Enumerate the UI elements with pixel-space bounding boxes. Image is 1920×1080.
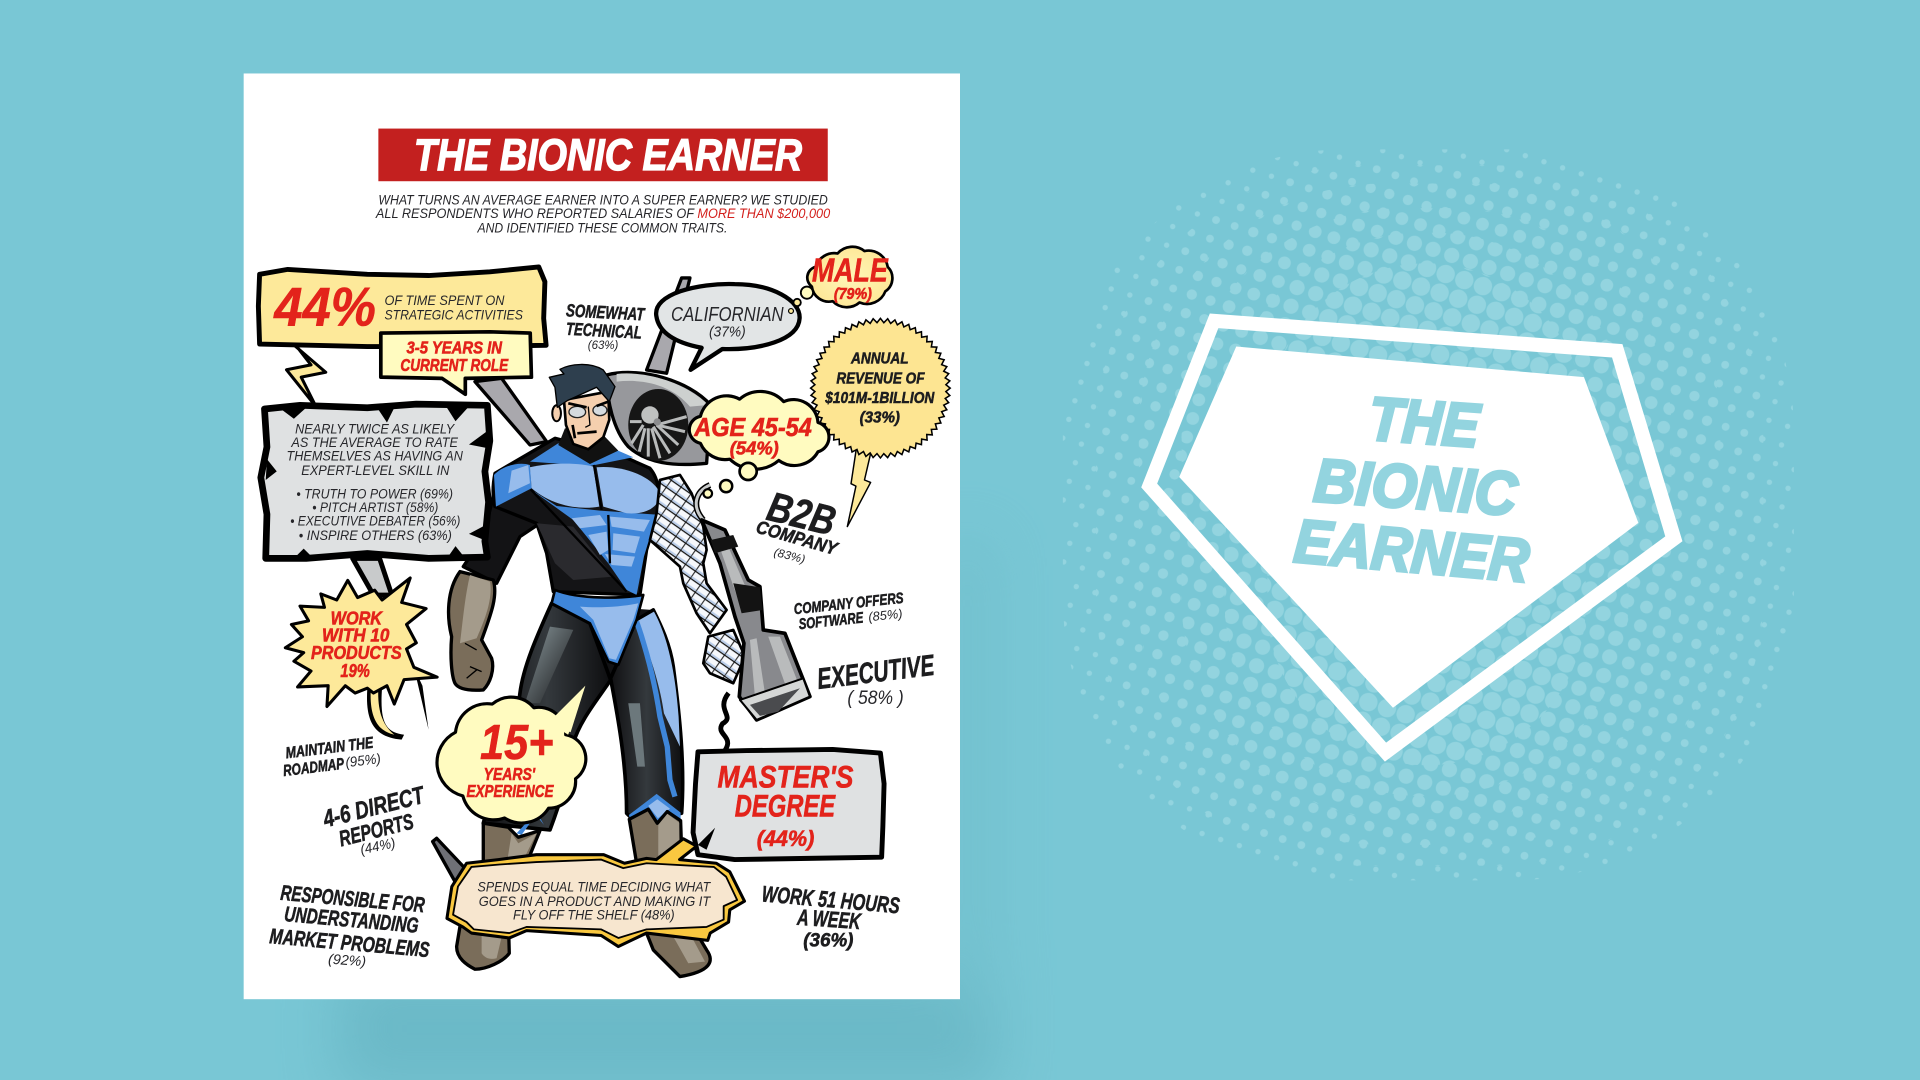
lightning tail <box>847 443 872 527</box>
shield title: BIONIC <box>1312 446 1520 528</box>
callout: annual revenue: (33%) <box>860 409 900 426</box>
label: b2b company: B2B <box>763 482 841 545</box>
spiky burst <box>796 304 965 472</box>
tail <box>353 558 392 595</box>
thought cloud: 15+ years: 15+ <box>480 716 553 770</box>
callout: expert-level skills: NEARLY TWICE AS LIKELY <box>295 420 456 436</box>
far arm and glove <box>449 483 550 690</box>
hero illustration <box>433 278 810 977</box>
callout: 3-5 years: 3-5 YEARS IN <box>407 337 503 357</box>
label: somewhat technical <box>566 300 646 352</box>
lightning tail <box>287 343 326 407</box>
callout: 44% strategic time <box>258 267 546 407</box>
hips and legs <box>483 603 683 830</box>
label: work 51 hours: WORK 51 HOURS <box>761 880 901 918</box>
shield title: THE <box>1367 385 1483 460</box>
label: responsible for market problems: RESPONSIBLE FOR <box>280 881 426 917</box>
label: work 51 hours: A WEEK <box>796 904 863 934</box>
callout: 3-5 years: CURRENT ROLE <box>400 355 509 375</box>
callout: 3-5 years <box>381 332 531 394</box>
abdominals <box>572 515 650 567</box>
callout: master's degree: (44%) <box>757 826 814 851</box>
label: maintain the roadmap: ROADMAP <box>282 756 345 780</box>
halftone dot field <box>1063 149 1794 880</box>
banner: equal time: SPENDS EQUAL TIME DECIDING WHAT <box>478 878 711 894</box>
label: responsible for market problems <box>269 881 431 969</box>
box <box>258 267 546 347</box>
label: b2b company <box>754 482 841 566</box>
callout: work with 10 products <box>285 578 437 740</box>
banner: equal time <box>447 839 744 947</box>
callout: expert-level skills: • TRUTH TO POWER (69%) <box>296 485 453 501</box>
label: maintain the roadmap: (95%) <box>344 750 382 770</box>
label: maintain the roadmap: MAINTAIN THE <box>285 735 375 762</box>
shield outer frame <box>1141 313 1682 762</box>
curly tail <box>367 667 429 740</box>
panel <box>261 404 490 558</box>
label: work 51 hours <box>761 880 901 952</box>
callout: work with 10 products: WORK <box>331 607 384 628</box>
intro text: AND IDENTIFIED THESE COMMON TRAITS. <box>477 220 727 236</box>
leg highlights and stripe <box>517 612 681 835</box>
callout: 44% strategic time: STRATEGIC ACTIVITIES <box>384 307 523 323</box>
card drop shadow <box>337 539 998 1080</box>
thought cloud: age: AGE 45-54 <box>693 414 812 442</box>
back rods <box>433 278 690 882</box>
boots <box>457 809 710 977</box>
label: executive: ( 58% ) <box>847 687 904 709</box>
poster card <box>244 73 960 999</box>
head <box>549 364 618 464</box>
label: maintain the roadmap <box>282 735 382 780</box>
label: company offers software: (85%) <box>868 606 903 624</box>
thought cloud: 15+ years: YEARS' <box>484 764 536 784</box>
callout: expert-level skills: AS THE AVERAGE TO RATE <box>291 434 458 450</box>
starburst <box>285 578 437 707</box>
intro text <box>375 191 830 236</box>
label: company offers software: SOFTWARE <box>798 609 865 633</box>
speech bubble: californian <box>656 284 800 370</box>
callout: expert-level skills: EXPERT-LEVEL SKILL IN <box>301 462 450 478</box>
callout: master's degree: DEGREE <box>735 788 836 824</box>
intro text: WHAT TURNS AN AVERAGE EARNER INTO A SUPER EARNER? WE STUDIED <box>378 191 828 207</box>
callout: annual revenue: REVENUE OF <box>836 370 926 387</box>
callout: expert-level skills <box>261 404 490 595</box>
pectorals <box>530 464 599 508</box>
label: responsible for market problems: (92%) <box>328 951 367 969</box>
robotic arm <box>650 475 745 683</box>
label: somewhat technical: TECHNICAL <box>566 319 642 343</box>
callout: 44% strategic time: 44% <box>273 276 376 338</box>
jet engine <box>607 372 711 464</box>
callout: master's degree: MASTER'S <box>718 758 853 794</box>
title banner: THE BIONIC EARNER <box>414 131 802 180</box>
label: somewhat technical: (63%) <box>588 339 618 352</box>
thought cloud: male: (79%) <box>834 286 872 303</box>
callout: master's degree <box>693 749 884 860</box>
callout: expert-level skills: • INSPIRE OTHERS (63%) <box>299 527 452 543</box>
label: executive <box>815 649 937 709</box>
callout: expert-level skills: THEMSELVES AS HAVING AN <box>287 447 464 463</box>
callout: expert-level skills: • PITCH ARTIST (58%) <box>312 499 438 515</box>
thought cloud: 15+ years <box>437 686 586 823</box>
cannon <box>696 485 810 720</box>
banner: equal time: GOES IN A PRODUCT AND MAKING IT <box>479 893 711 909</box>
callout: work with 10 products: WITH 10 <box>322 625 390 646</box>
shield inner plate <box>1179 347 1638 708</box>
callout: work with 10 products: 19% <box>340 660 370 681</box>
thought cloud: male: MALE <box>812 253 889 290</box>
label: direct reports: 4-6 DIRECT <box>320 782 428 833</box>
thought cloud: male <box>789 247 892 313</box>
callout: annual revenue: ANNUAL <box>850 351 909 368</box>
thought cloud: 15+ years: EXPERIENCE <box>467 781 554 801</box>
speech bubble: californian: (37%) <box>709 325 746 341</box>
suit collar and shoulder <box>530 443 633 466</box>
label: responsible for market problems: MARKET PROBLEMS <box>269 924 431 962</box>
label: company offers software: COMPANY OFFERS <box>793 590 905 618</box>
hose to master's degree <box>721 693 729 751</box>
shield emblem <box>1141 313 1682 762</box>
panel ink drips <box>266 408 487 558</box>
thought cloud: age: (54%) <box>730 437 779 458</box>
callout: work with 10 products: PRODUCTS <box>311 642 402 663</box>
callout: annual revenue: $101M-1BILLION <box>824 390 935 407</box>
callout: expert-level skills: • EXECUTIVE DEBATER (56%) <box>290 512 460 528</box>
callout: annual revenue <box>796 304 965 527</box>
speech bubble: californian: CALIFORNIAN <box>671 304 784 326</box>
label: responsible for market problems: UNDERSTANDING <box>283 902 420 938</box>
label: work 51 hours: (36%) <box>803 931 853 952</box>
label: b2b company: (83%) <box>772 546 807 566</box>
label: executive: EXECUTIVE <box>815 649 937 696</box>
label: company offers software <box>793 590 905 633</box>
banner: equal time: FLY OFF THE SHELF (48%) <box>513 907 675 923</box>
callout: 44% strategic time: OF TIME SPENT ON <box>384 292 505 308</box>
intro text: ALL RESPONDENTS WHO REPORTED SALARIES OF MORE THAN $200,000 <box>375 205 830 221</box>
label: direct reports: REPORTS <box>336 809 416 851</box>
label: direct reports: (44%) <box>359 834 397 857</box>
trunks <box>552 590 643 665</box>
torso <box>493 438 660 595</box>
label: somewhat technical: SOMEWHAT <box>566 300 646 324</box>
label: direct reports <box>320 782 428 857</box>
shield title <box>1292 385 1532 595</box>
thought cloud: age <box>689 391 829 498</box>
label: b2b company: COMPANY <box>754 516 841 559</box>
shield title: EARNER <box>1292 507 1532 595</box>
